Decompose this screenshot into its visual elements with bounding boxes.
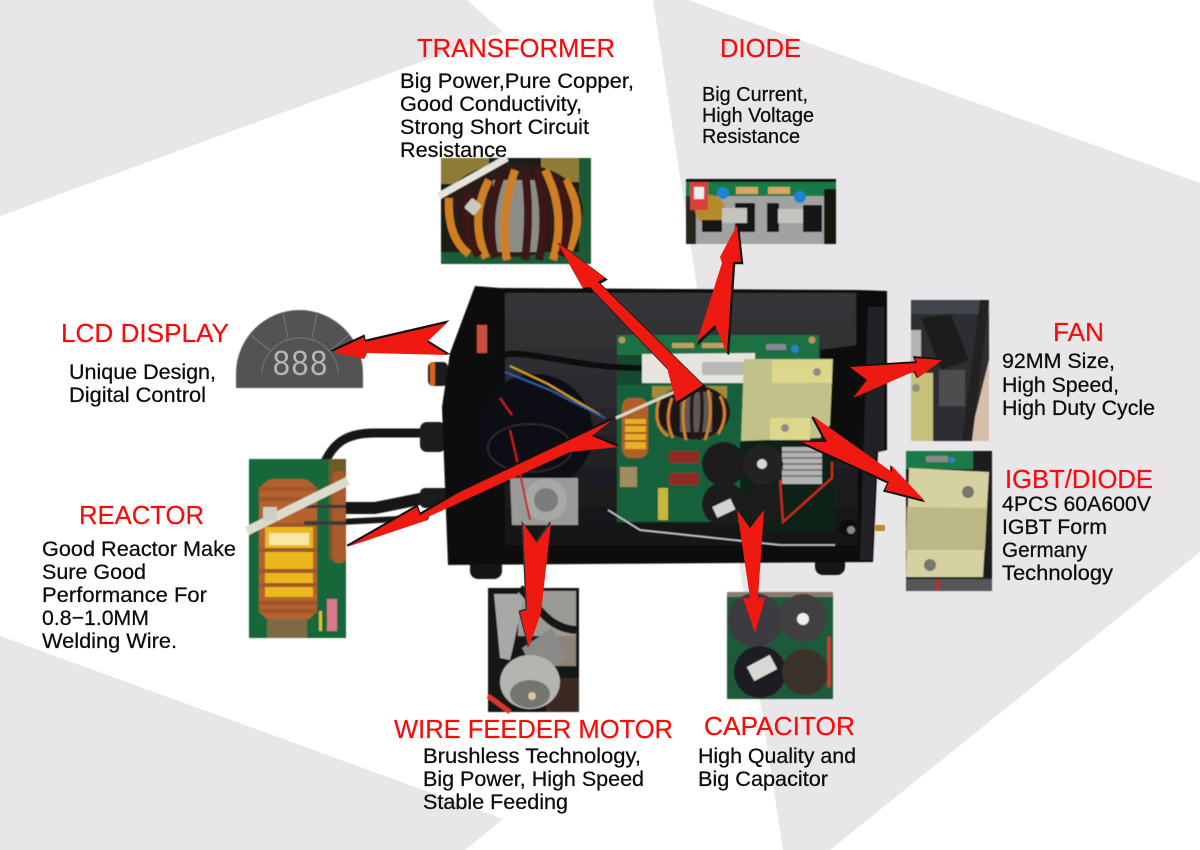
callout: fan: FAN xyxy=(1053,317,1104,347)
callout: wire feeder motor: Brushless Technology, xyxy=(423,744,641,768)
photo: transformer xyxy=(437,155,592,265)
arrow: capacitor xyxy=(737,510,765,633)
wiring harness xyxy=(510,366,600,415)
heat sink fins xyxy=(782,447,822,484)
callout: capacitor: High Quality and xyxy=(698,744,856,768)
power cables xyxy=(325,433,445,522)
small component xyxy=(620,467,637,487)
photo: reactor xyxy=(244,458,350,639)
chassis xyxy=(442,286,887,565)
callout: transformer: Good Conductivity, xyxy=(400,92,582,116)
callout: fan: High Speed, xyxy=(1002,373,1119,397)
callout: reactor: Welding Wire. xyxy=(42,629,177,653)
callout: diode xyxy=(702,33,814,148)
callout: fan: 92MM Size, xyxy=(1002,349,1115,373)
photo: wire feeder motor xyxy=(486,584,580,714)
welding machine interior photo xyxy=(325,286,887,579)
callout: transformer xyxy=(400,33,634,162)
callout: LCD display: Unique Design, xyxy=(69,360,216,384)
callout: capacitor: Big Capacitor xyxy=(698,767,828,791)
red wires xyxy=(780,462,832,522)
callout: fan xyxy=(1002,317,1155,420)
callout: wire feeder motor: Big Power, High Speed xyxy=(423,767,644,791)
motor plate xyxy=(510,478,578,525)
callout: fan: High Duty Cycle xyxy=(1002,396,1155,420)
photo: IGBT diode xyxy=(905,450,993,592)
LCD display panel xyxy=(236,310,363,388)
front panel connector xyxy=(477,325,487,353)
callout: transformer: Big Power,Pure Copper, xyxy=(400,69,634,93)
callout: diode: Resistance xyxy=(702,126,800,148)
callout: IGBT diode: Germany xyxy=(1002,538,1087,562)
callout: LCD display: Digital Control xyxy=(69,383,206,407)
callout: wire feeder motor xyxy=(394,714,673,814)
photo: capacitor xyxy=(726,591,834,700)
arrow: transformer xyxy=(557,242,704,404)
top PCB xyxy=(617,335,819,359)
knob xyxy=(428,362,448,386)
insulation pad xyxy=(741,359,833,441)
callout: capacitor xyxy=(698,711,856,791)
main PCB xyxy=(617,380,747,522)
pad screws xyxy=(813,368,821,376)
callout: reactor: Performance For xyxy=(42,583,207,607)
callout: IGBT diode: IGBT Form xyxy=(1002,515,1107,539)
feet xyxy=(470,555,502,579)
callout: IGBT diode: Technology xyxy=(1002,561,1113,585)
callout: reactor: 0.8−1.0MM xyxy=(42,606,149,630)
yellow component xyxy=(658,488,668,520)
transformer coil on board xyxy=(656,385,730,439)
callout: wire feeder motor: WIRE FEEDER MOTOR xyxy=(394,714,673,744)
callout: diode: Big Current, xyxy=(702,84,808,106)
callout: transformer: Strong Short Circuit xyxy=(400,115,589,139)
reactor coil on board xyxy=(622,398,648,458)
photo: fan xyxy=(910,299,990,442)
callout: reactor: REACTOR xyxy=(79,500,204,530)
callout: reactor xyxy=(42,500,236,653)
inner back panel xyxy=(505,293,858,545)
callout: transformer: Resistance xyxy=(400,138,507,162)
callout: LCD display xyxy=(61,318,229,407)
round fan xyxy=(477,374,593,490)
arrow: wire feeder motor xyxy=(519,522,551,647)
callout: IGBT diode xyxy=(1002,464,1153,585)
callout: capacitor: CAPACITOR xyxy=(704,711,855,741)
heat sink bar xyxy=(642,353,755,383)
fan shroud xyxy=(820,345,858,460)
arrow: diode xyxy=(697,225,742,354)
red capacitors xyxy=(669,451,699,463)
thick internal cable xyxy=(468,354,642,395)
arrow: reactor xyxy=(347,418,618,547)
arrow: IGBT diode xyxy=(801,416,924,501)
right fold xyxy=(860,307,884,560)
LCD digits: 888 xyxy=(272,345,328,386)
callout: wire feeder motor: Stable Feeding xyxy=(423,790,568,814)
callout: diode: High Voltage xyxy=(702,105,814,127)
callout: reactor: Good Reactor Make xyxy=(42,537,236,561)
motor xyxy=(525,479,567,521)
callout: reactor: Sure Good xyxy=(42,560,146,584)
arrow: fan xyxy=(849,357,942,398)
callout: IGBT diode: 4PCS 60A600V xyxy=(1002,492,1152,516)
callout: LCD display: LCD DISPLAY xyxy=(61,318,229,348)
arrow: LCD display xyxy=(332,322,448,359)
cable gland xyxy=(420,422,446,452)
output stud xyxy=(839,519,857,537)
big electrolytic capacitors xyxy=(702,442,746,486)
callout: diode: DIODE xyxy=(720,33,801,63)
photo: diode xyxy=(685,178,837,245)
callout: transformer: TRANSFORMER xyxy=(417,33,615,63)
white cable tie xyxy=(616,385,690,418)
callout: IGBT diode: IGBT/DIODE xyxy=(1005,464,1153,494)
